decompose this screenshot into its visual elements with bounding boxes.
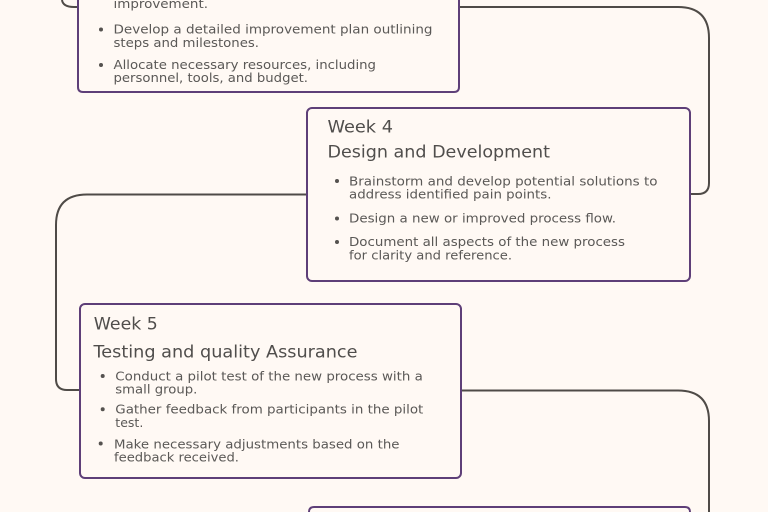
- connector: week 4 to week 5: [56, 194, 308, 390]
- connector: week 3 to week 4: [458, 7, 709, 194]
- bullet: document: Document all aspects of the new process: [349, 234, 625, 249]
- bullet: feedback: test.: [115, 415, 143, 430]
- bullet: allocate resources: [99, 57, 376, 85]
- panel: week 6: [309, 507, 690, 512]
- bullet: allocate resources: Allocate necessary resources, including: [114, 57, 376, 72]
- bullet: feedback: [101, 402, 423, 430]
- bullet: brainstorm: address identified pain points.: [349, 187, 552, 202]
- bullet: allocate resources: personnel, tools, and budget.: [114, 70, 308, 85]
- heading: Design and Development: [328, 142, 550, 162]
- connector: into week 3: [62, 0, 80, 7]
- connector: week 5 to week 6: [460, 390, 709, 512]
- bullet: improvement plan: steps and milestones.: [114, 35, 259, 50]
- bullet: design flow: Design a new or improved process flow.: [349, 211, 616, 226]
- bullet: pilot test: [101, 368, 423, 397]
- bullet: adjustments: Make necessary adjustments based on the: [114, 436, 400, 451]
- bullet: brainstorm: Brainstorm and develop potential solutions to: [349, 173, 658, 188]
- panel: week 3: [78, 0, 459, 92]
- week label: Week 5: [94, 315, 158, 335]
- bullet: improvement plan: Develop a detailed improvement plan outlining: [114, 22, 432, 36]
- bullet: adjustments: feedback received.: [114, 450, 239, 465]
- bullet: document: for clarity and reference.: [349, 247, 512, 262]
- bullet: document: [335, 234, 625, 262]
- bullet: pilot test: small group.: [115, 382, 197, 397]
- panel: week 5: [80, 304, 461, 478]
- week label: Week 4: [328, 117, 393, 137]
- bullet: feedback: Gather feedback from participants in the pilot: [115, 402, 423, 417]
- bullet: brainstorm: [335, 173, 658, 202]
- panel: week 4: [307, 108, 690, 281]
- bullet: adjustments: [99, 436, 400, 465]
- bullet: improvement plan: [99, 22, 432, 50]
- bullet: pilot test: Conduct a pilot test of the new process with a: [115, 368, 423, 383]
- heading: Testing and quality Assurance: [92, 343, 358, 363]
